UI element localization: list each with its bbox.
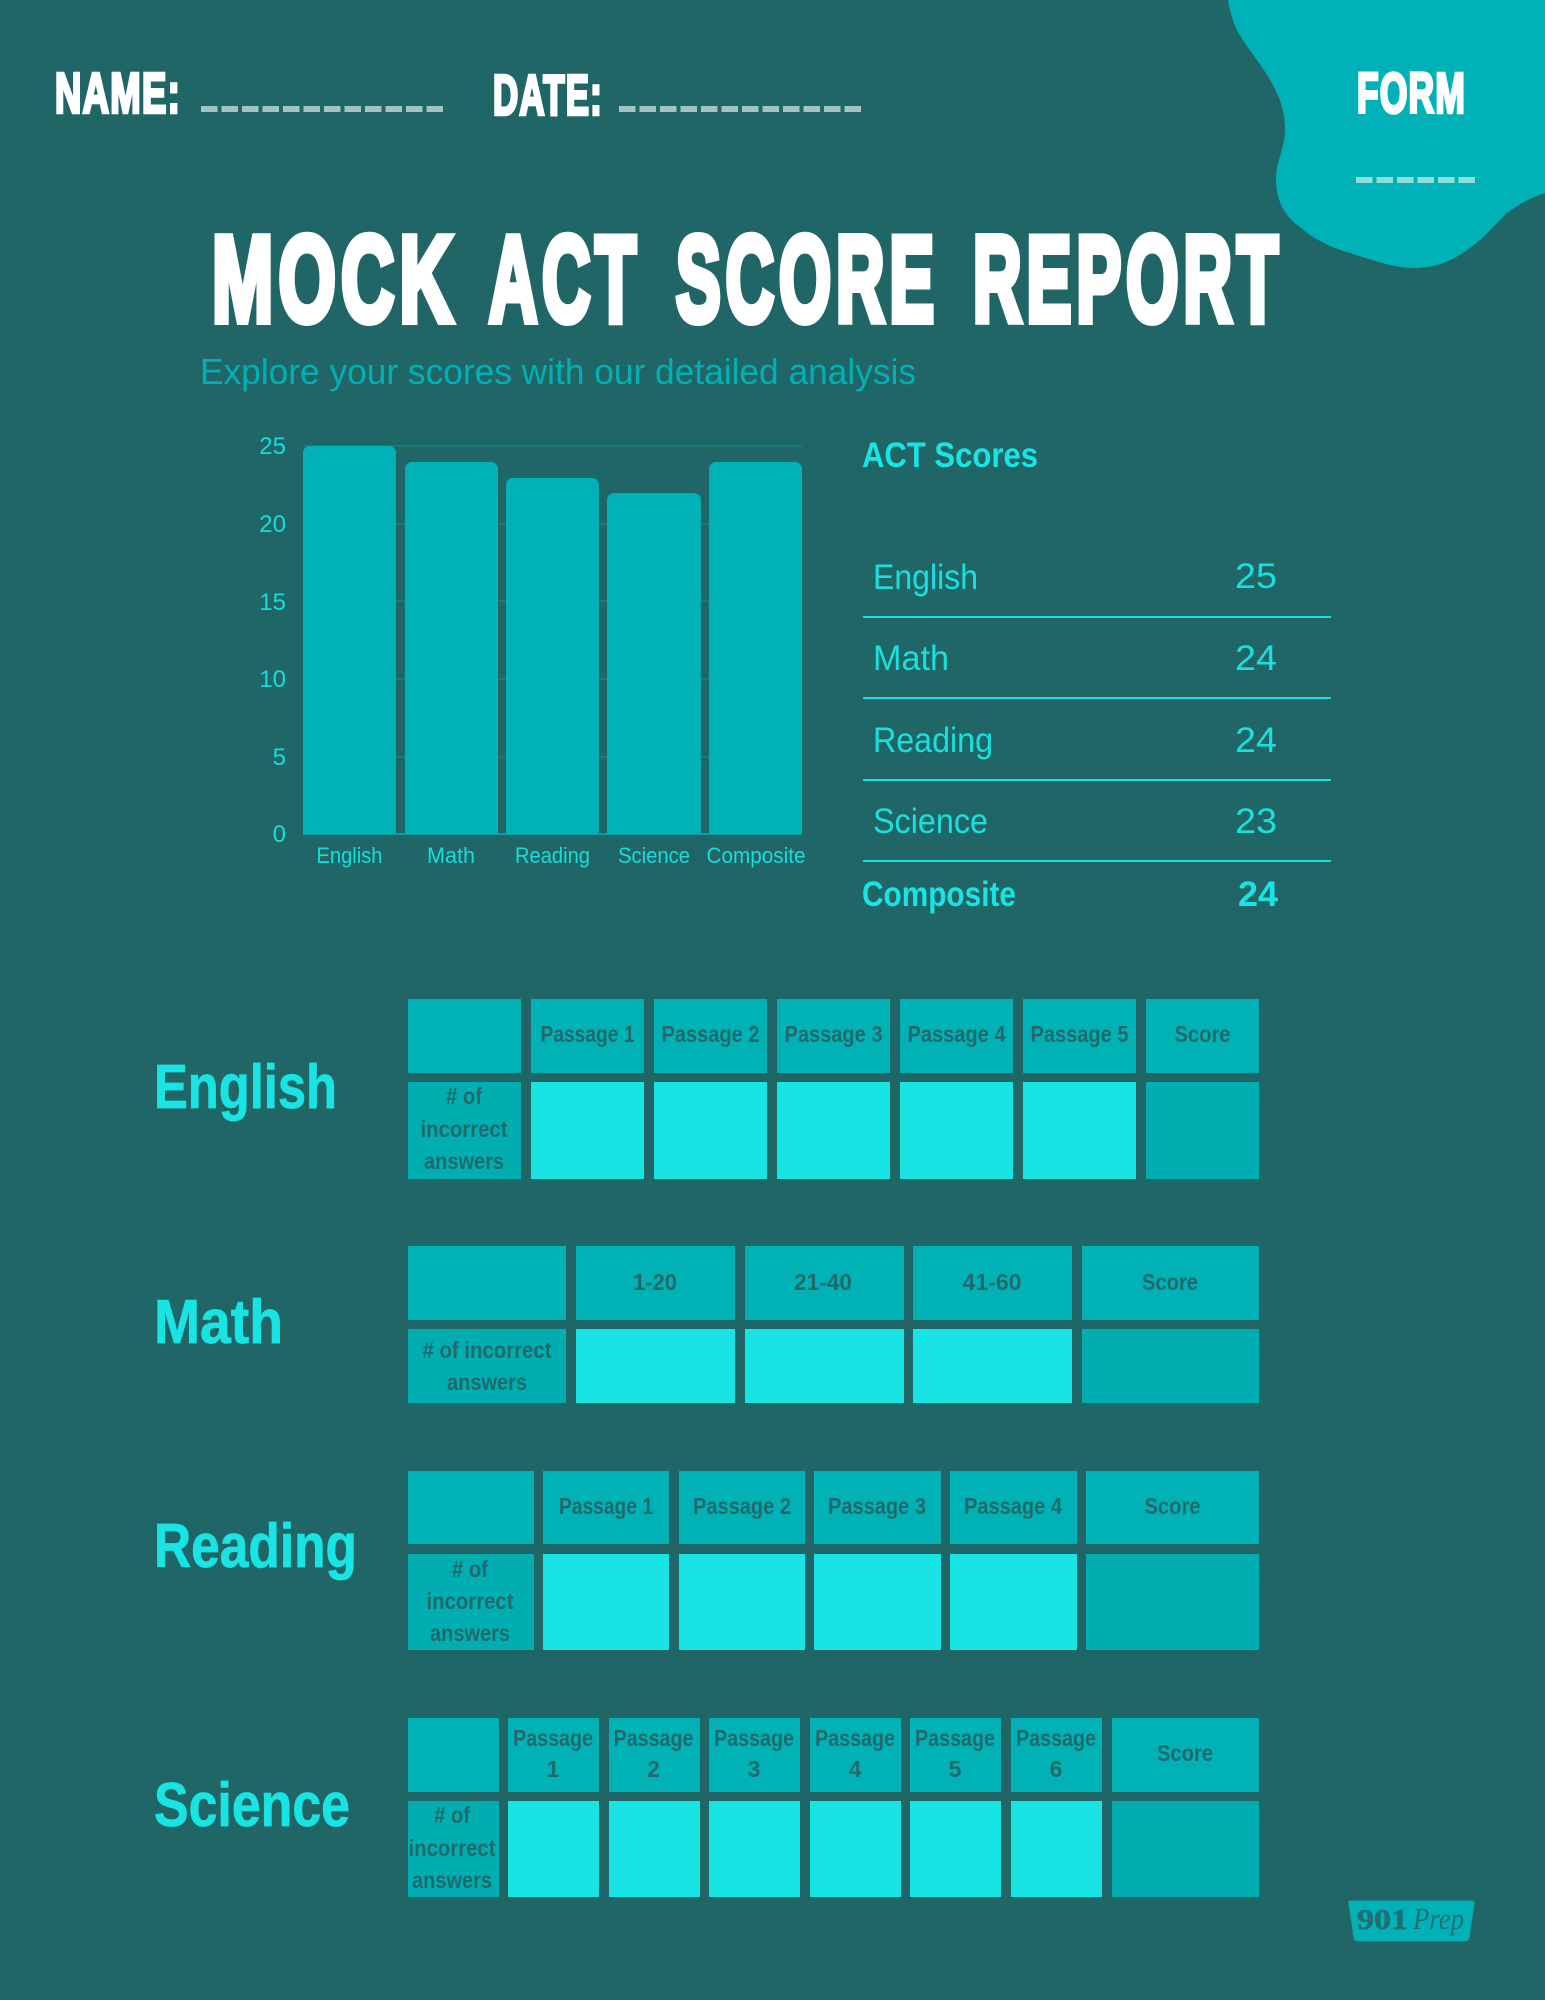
y axis labels: 5 — [273, 744, 286, 771]
row: English: 25 — [1235, 557, 1277, 596]
header row: 41-60 — [962, 1269, 1022, 1295]
logo: 901 Prep — [1349, 1901, 1474, 1941]
title: ACT — [489, 211, 641, 347]
header row: Passage 3 — [784, 1021, 882, 1047]
header row: Passage 5 — [1030, 1021, 1129, 1047]
row: Science — [863, 802, 1331, 862]
answer row — [408, 1554, 1259, 1650]
answer row: incorrect — [426, 1588, 514, 1614]
answer row: # of — [452, 1556, 488, 1582]
row: Composite: 24 — [1238, 875, 1279, 914]
answer row — [408, 1329, 1259, 1403]
row: Science: 23 — [1235, 802, 1277, 841]
header row: 1-20 — [633, 1269, 677, 1295]
title — [212, 211, 1283, 347]
y axis labels: 0 — [273, 821, 286, 848]
header row: Passage 4 — [908, 1021, 1006, 1047]
answer row: answers — [447, 1369, 527, 1395]
header row: Passage 1 — [559, 1493, 653, 1519]
header row: Passage — [513, 1725, 593, 1751]
answer row: # of — [434, 1802, 470, 1828]
bars — [303, 446, 802, 834]
row: Reading: Reading — [873, 721, 993, 760]
answer row: incorrect — [420, 1116, 508, 1142]
header row — [408, 999, 1259, 1073]
header row — [408, 1471, 1259, 1544]
row: Math — [863, 639, 1331, 699]
panel: English — [154, 999, 1259, 1179]
name blank line — [201, 106, 443, 112]
header row: Passage — [915, 1725, 995, 1751]
row: Math: Math — [873, 639, 949, 678]
heading: Science: Science — [154, 1771, 350, 1840]
header: form field — [1356, 62, 1475, 180]
x axis labels — [316, 843, 806, 868]
header row: 5 — [949, 1756, 962, 1782]
row: Composite — [862, 875, 1279, 914]
answer row: # of incorrect — [422, 1337, 552, 1363]
scores heading: ACT Scores — [862, 436, 1038, 475]
header row: Passage 4 — [964, 1493, 1062, 1519]
header row: Passage 3 — [828, 1493, 926, 1519]
y axis labels: 15 — [259, 589, 286, 616]
header row: Score — [1174, 1021, 1230, 1047]
header row — [408, 1246, 1259, 1320]
row: English: English — [873, 558, 978, 597]
row: Science: Science — [873, 802, 988, 841]
heading: English: English — [154, 1053, 337, 1122]
x axis labels: Math — [427, 843, 475, 868]
header row: Passage 2 — [693, 1493, 791, 1519]
header row: 4 — [849, 1756, 862, 1782]
answer row: answers — [424, 1148, 504, 1174]
corner blob — [1228, 0, 1545, 268]
header row: 2 — [647, 1756, 660, 1782]
heading: Reading: Reading — [154, 1512, 357, 1581]
answer row: # of — [446, 1083, 482, 1109]
title: SCORE — [676, 211, 939, 347]
form label: FORM — [1357, 62, 1466, 126]
header row: Score — [1142, 1269, 1198, 1295]
answer row: incorrect — [408, 1835, 496, 1861]
row: Math: 24 — [1235, 639, 1277, 678]
panel: Reading — [154, 1471, 1259, 1650]
header row — [408, 1718, 1259, 1792]
header row: Passage — [714, 1725, 794, 1751]
row: English — [863, 557, 1331, 618]
subtitle: Explore your scores with our detailed analysis — [200, 351, 916, 392]
header row: Passage 2 — [662, 1021, 760, 1047]
form blank line — [1356, 177, 1475, 183]
row: Composite: Composite — [862, 875, 1016, 914]
header row: Passage 1 — [540, 1021, 635, 1047]
logo wordmark: 901 — [1357, 1904, 1408, 1936]
chart gridlines — [303, 446, 802, 834]
date blank line — [619, 106, 861, 112]
x axis labels: English — [316, 843, 382, 868]
title: REPORT — [973, 211, 1283, 347]
title: MOCK — [212, 211, 458, 347]
row: Reading: 24 — [1235, 721, 1277, 760]
panel: Math — [154, 1246, 1259, 1403]
header row: 3 — [748, 1756, 760, 1782]
heading: Math: Math — [154, 1288, 283, 1357]
bar chart — [259, 433, 806, 868]
y axis labels: 20 — [259, 511, 286, 538]
header row: 21-40 — [794, 1269, 852, 1295]
date label: DATE: — [493, 64, 603, 128]
y axis labels — [259, 433, 286, 848]
header row: Passage — [614, 1725, 694, 1751]
answer row: answers — [412, 1867, 492, 1893]
header row: 1 — [547, 1756, 560, 1782]
row: Reading — [863, 721, 1331, 781]
logo badge — [1349, 1901, 1474, 1941]
answer row: answers — [430, 1620, 510, 1646]
x axis labels: Composite — [706, 843, 806, 868]
header row: Score — [1144, 1493, 1200, 1519]
panel: Science — [154, 1718, 1259, 1897]
answer row — [408, 1801, 1259, 1897]
logo script: Prep — [1412, 1901, 1464, 1936]
name label: NAME: — [55, 62, 181, 126]
header row: Score — [1157, 1740, 1213, 1766]
scores table — [862, 436, 1331, 914]
y axis labels: 10 — [259, 666, 286, 693]
y axis labels: 25 — [259, 433, 286, 460]
header row: 6 — [1050, 1756, 1062, 1782]
answer row — [408, 1082, 1259, 1179]
header row: Passage — [815, 1725, 895, 1751]
header row: Passage — [1016, 1725, 1096, 1751]
x axis labels: Science — [618, 843, 690, 868]
x axis labels: Reading — [515, 843, 590, 868]
